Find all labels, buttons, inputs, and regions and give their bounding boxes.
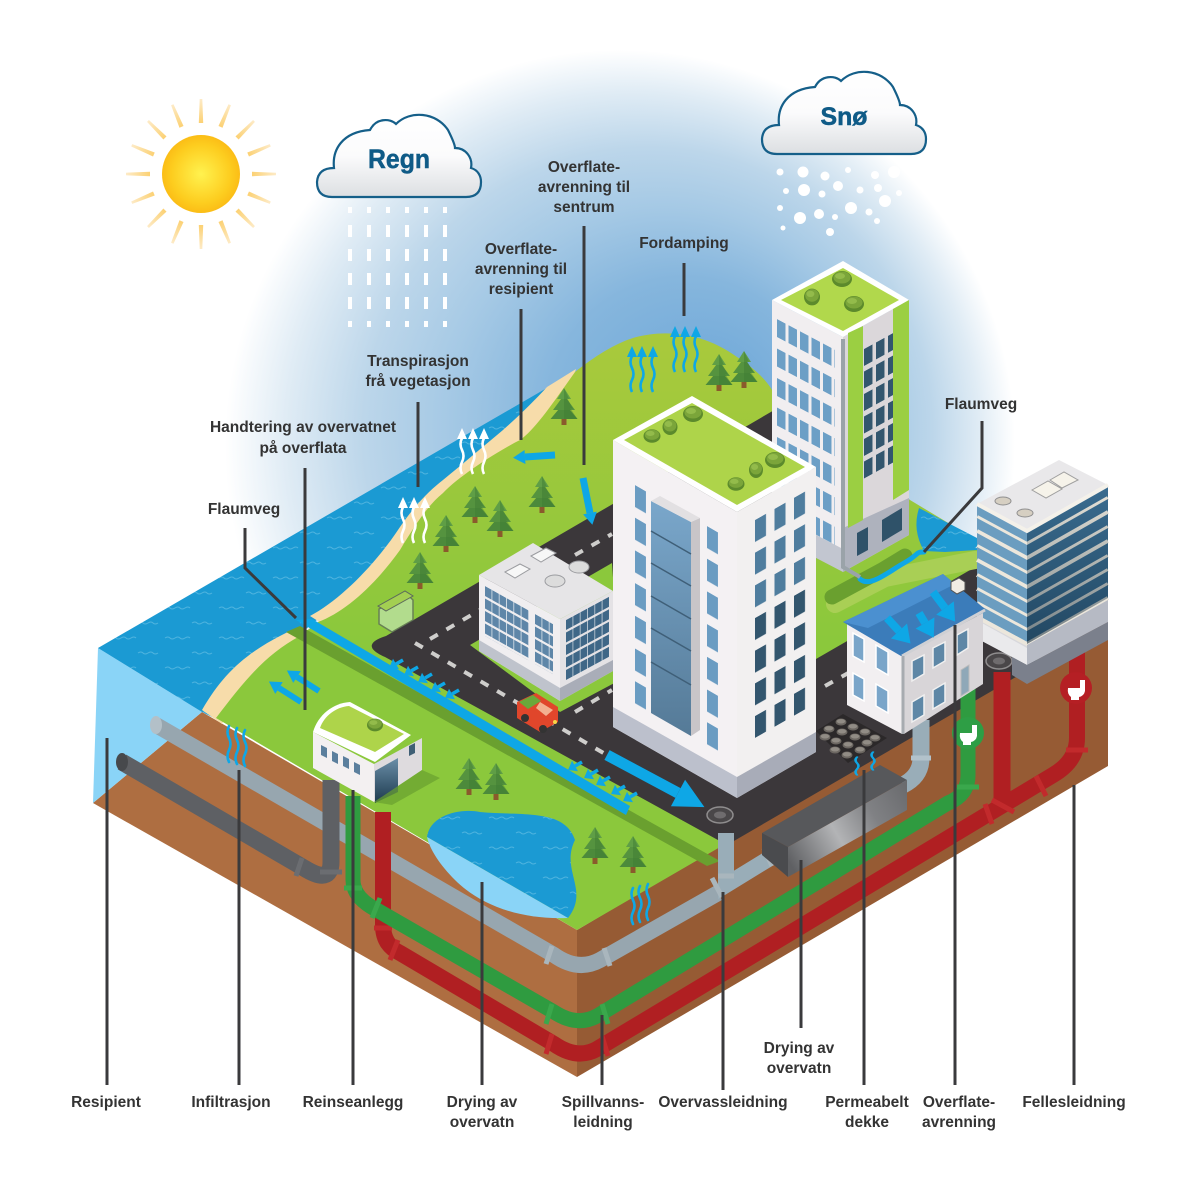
background glow bbox=[225, 50, 1015, 840]
house bbox=[843, 574, 985, 734]
sand beach bbox=[202, 369, 576, 724]
label: Overflate-avrenning til resipient: avrenning til bbox=[475, 261, 567, 278]
label: Overflate-avrenning til resipient: resipient bbox=[489, 281, 553, 298]
house windows bbox=[853, 633, 888, 713]
water surface bbox=[98, 385, 600, 722]
blue flow arrows bbox=[279, 455, 945, 797]
permeable pavement bbox=[816, 714, 887, 763]
label: Permeabelt dekke: dekke bbox=[845, 1114, 889, 1131]
pipe: wastewater green bbox=[344, 668, 979, 1024]
back tower bbox=[772, 261, 909, 577]
icon: truck bbox=[517, 693, 558, 733]
label: Transpirasjon: Transpirasjon bbox=[367, 353, 469, 370]
label: Handtering: Handtering av overvatnet bbox=[210, 419, 396, 436]
label: Overflate-avrenning til resipient: Overflate- bbox=[485, 241, 557, 258]
leader lines bbox=[107, 226, 1074, 1090]
gully arrows upper bbox=[396, 660, 459, 694]
land bbox=[216, 333, 1040, 930]
label: Drying av overvatn tank: overvatn bbox=[767, 1060, 831, 1077]
label: Reinseanlegg: Reinseanlegg bbox=[303, 1094, 403, 1111]
heading: Snø: Snø bbox=[820, 103, 868, 131]
trees bbox=[406, 351, 758, 873]
label: Infiltrasjon: Infiltrasjon bbox=[191, 1094, 271, 1111]
swale and flood channel right bbox=[832, 552, 975, 604]
pipe: wastewater red bbox=[374, 650, 1088, 1056]
flood channel left bbox=[286, 619, 720, 866]
detention tank bbox=[762, 720, 931, 877]
manholes bbox=[707, 653, 1012, 823]
glass panel bbox=[651, 501, 691, 736]
arrow: to recipient bbox=[525, 455, 555, 457]
label: Overflateavrenning: Overflate- bbox=[923, 1094, 995, 1111]
label: Drying av overvatn: overvatn bbox=[450, 1114, 514, 1131]
toilet icons bbox=[952, 672, 1092, 749]
label: Drying av overvatn tank: Drying av bbox=[764, 1040, 834, 1057]
label: Flaumveg left: Flaumveg bbox=[208, 501, 280, 518]
arrow: roof 3 bbox=[933, 592, 945, 608]
rain drops bbox=[350, 207, 445, 328]
arrow: road bbox=[607, 755, 678, 793]
pond bbox=[427, 811, 576, 918]
pipe: storm water bbox=[150, 716, 772, 966]
snowflakes bbox=[776, 166, 902, 236]
label: Overflate-avrenning til sentrum: avrenning til bbox=[538, 179, 630, 196]
arrow: roof 1 bbox=[887, 618, 899, 631]
heading: Regn: Regn bbox=[368, 144, 430, 174]
label: Spillvannsleidning: Spillvanns- bbox=[562, 1094, 644, 1111]
icon: bus shelter bbox=[378, 591, 413, 632]
label: Fordamping: Fordamping bbox=[639, 235, 729, 252]
road network bbox=[372, 409, 1040, 845]
infiltration waves bbox=[228, 726, 874, 924]
label: Drying av overvatn: Drying av bbox=[447, 1094, 517, 1111]
green plot under office bbox=[470, 563, 620, 712]
icon: sun bbox=[126, 99, 276, 249]
side section: water depth bbox=[93, 648, 202, 803]
icon: rain cloud bbox=[317, 115, 481, 197]
pipe: dark outlet bbox=[116, 753, 342, 876]
arrow: left surface upper bbox=[297, 677, 319, 691]
gully arrows lower bbox=[575, 762, 637, 797]
label: Overvassleidning: Overvassleidning bbox=[658, 1094, 788, 1111]
transpiration arrows bbox=[398, 428, 489, 543]
treatment plant bbox=[313, 702, 440, 805]
main tower bbox=[613, 396, 816, 798]
side section: right earth bbox=[577, 615, 1108, 1077]
label: Flaumveg right: Flaumveg bbox=[945, 396, 1017, 413]
label: Permeabelt dekke: Permeabelt bbox=[825, 1094, 909, 1111]
right striped building bbox=[977, 460, 1108, 684]
arrow: left surface lower bbox=[279, 688, 301, 702]
label: Overflate-avrenning til sentrum: Overflate- bbox=[548, 159, 620, 176]
icon: snow cloud bbox=[762, 72, 926, 154]
right lake water bbox=[916, 508, 977, 552]
evaporation arrows bbox=[627, 326, 701, 392]
arrow: to centre bbox=[583, 478, 590, 513]
arrow: roof 2 bbox=[919, 613, 925, 623]
label: Overflateavrenning: avrenning bbox=[922, 1114, 996, 1131]
label: Spillvannsleidning: leidning bbox=[573, 1114, 633, 1131]
label: Handtering: på overflata bbox=[259, 440, 347, 457]
label: Fellesleidning: Fellesleidning bbox=[1022, 1094, 1126, 1111]
label: Transpirasjon: frå vegetasjon bbox=[365, 373, 471, 390]
road markings bbox=[415, 534, 850, 758]
side section: left earth bbox=[93, 712, 577, 1077]
office building bbox=[479, 543, 613, 701]
label: Overflate-avrenning til sentrum: sentrum bbox=[553, 199, 615, 216]
label: Resipient: Resipient bbox=[71, 1094, 141, 1111]
window columns bbox=[635, 485, 646, 713]
